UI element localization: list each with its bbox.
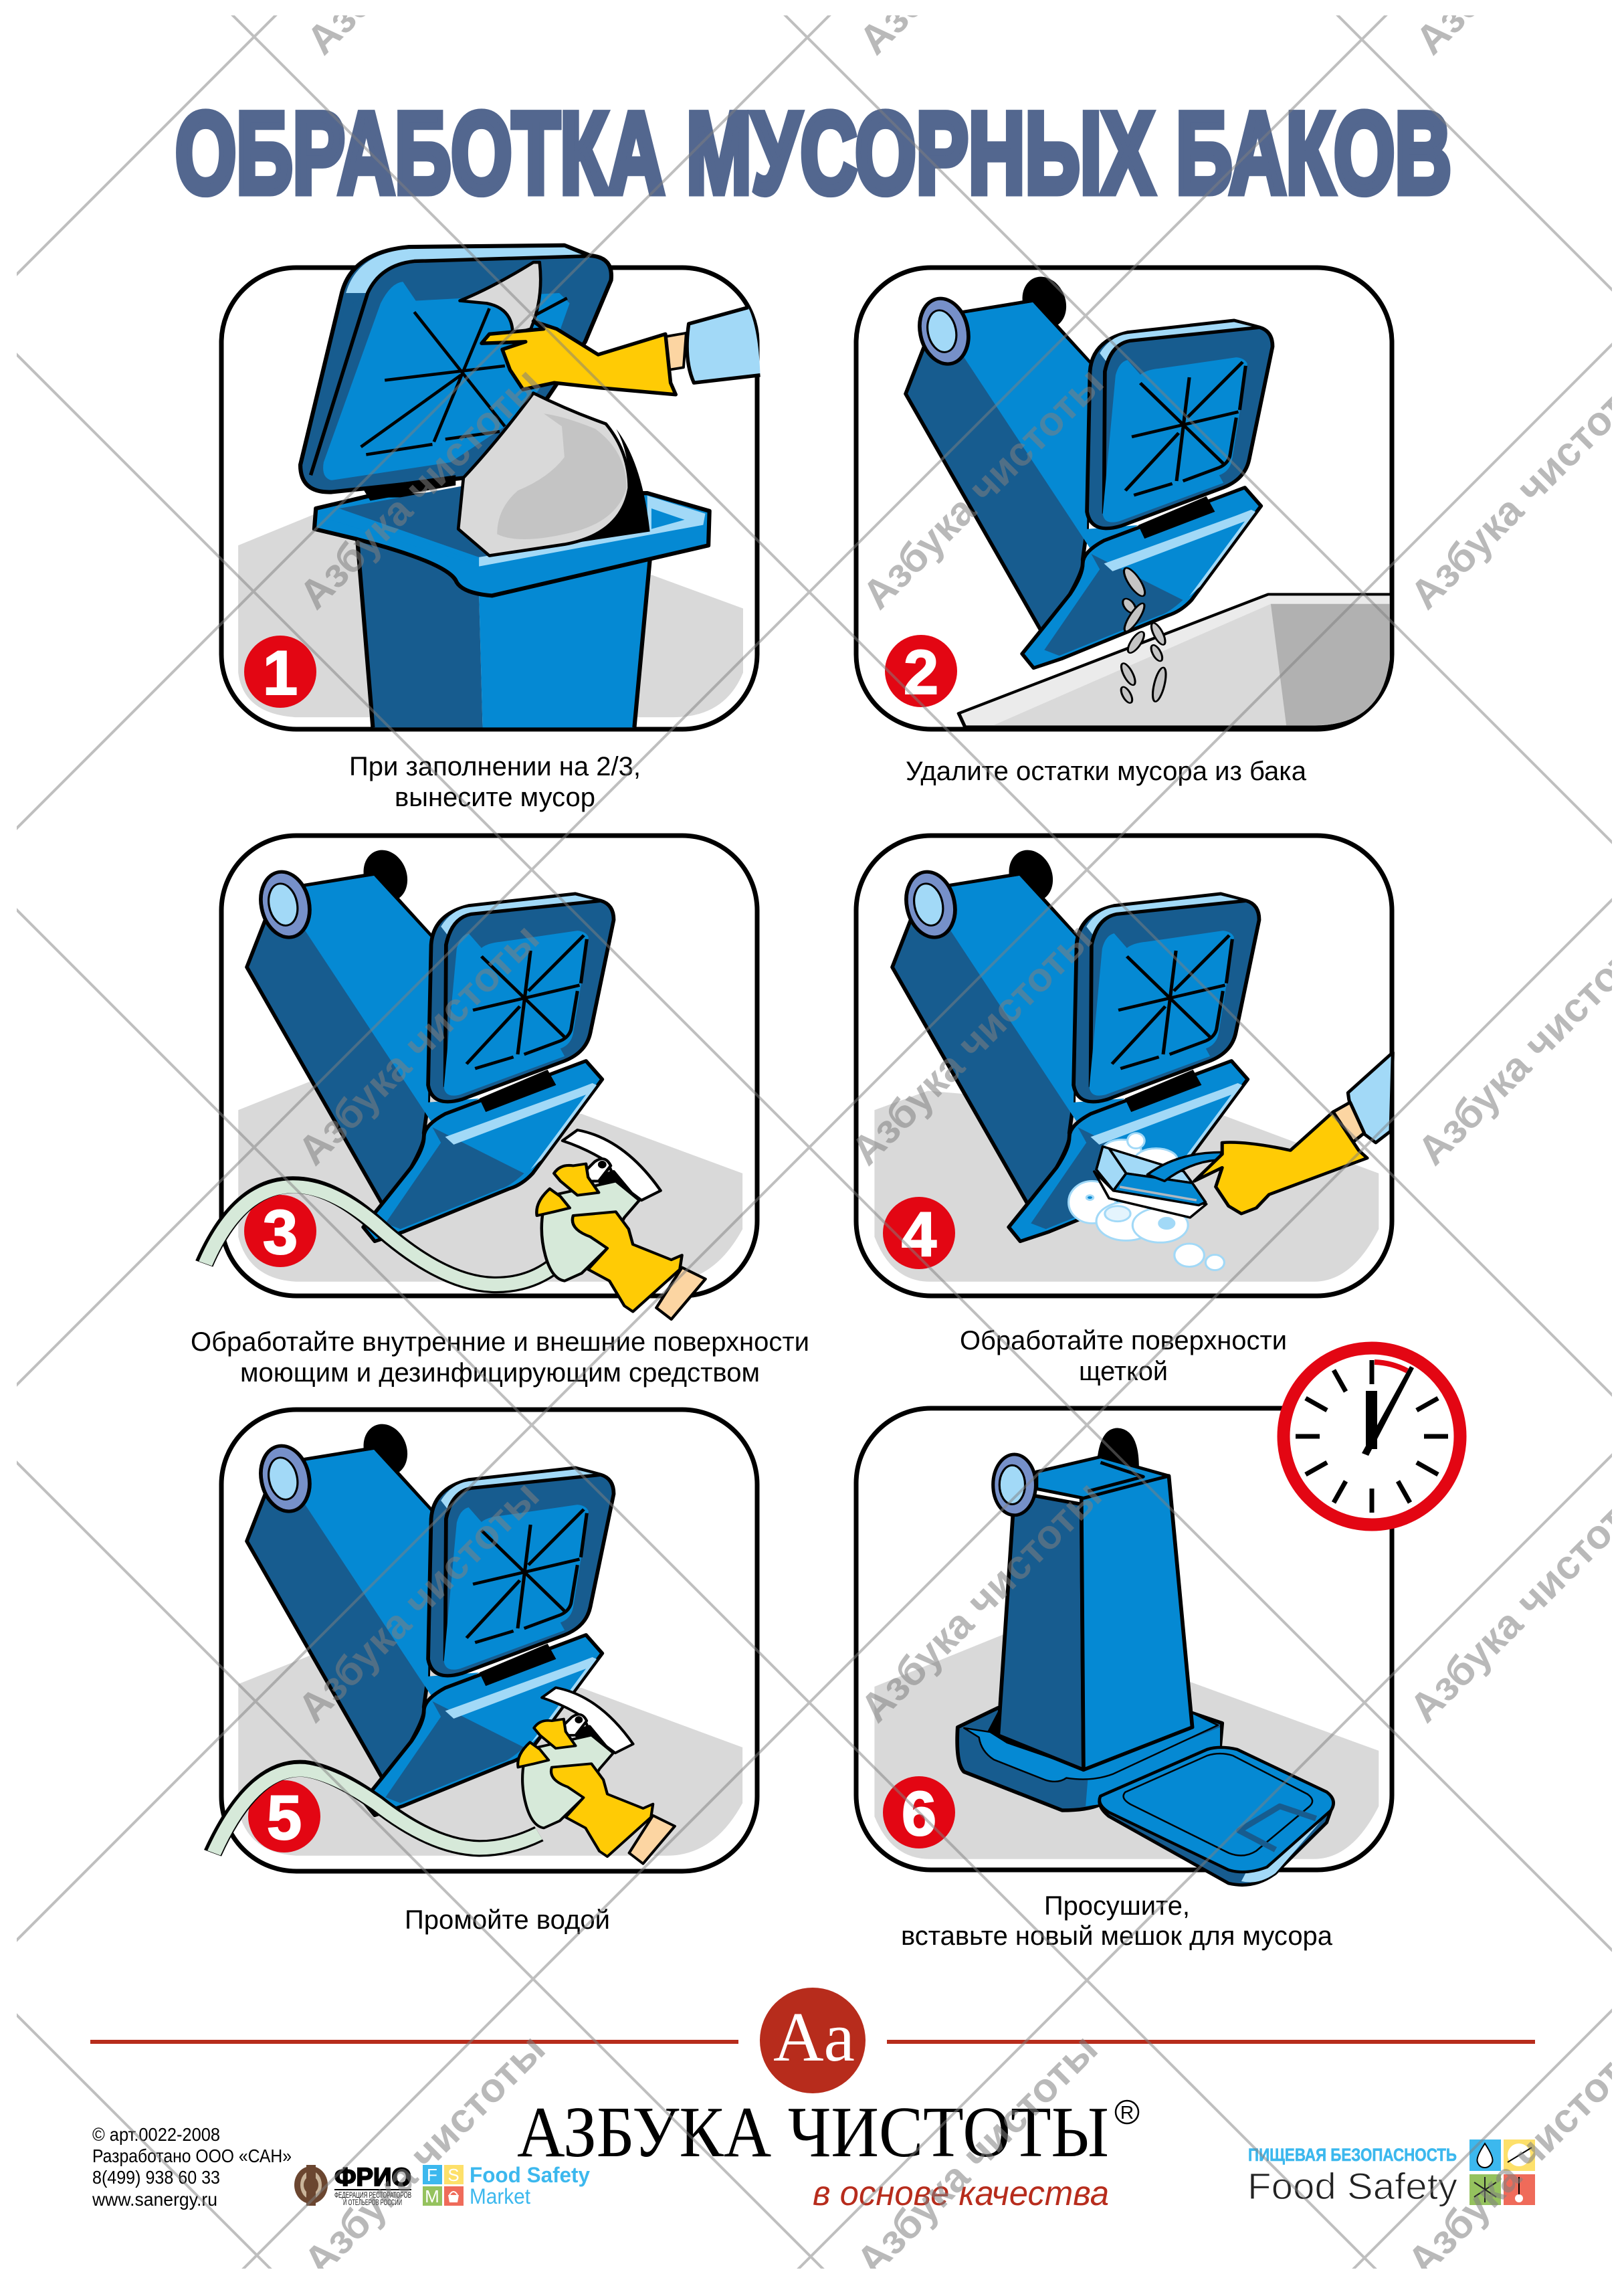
watermark text: Азбука чистоты bbox=[853, 359, 1112, 617]
panel 3: applying detergent bbox=[204, 836, 757, 1319]
clock face bbox=[1284, 1348, 1460, 1525]
watermark text: Азбука чистоты bbox=[289, 915, 548, 1173]
FRIO name: ФРИО bbox=[334, 2164, 411, 2192]
caption 3: Обработайте внутренние и внешние поверхности bbox=[191, 1327, 809, 1357]
FSM text bbox=[470, 2163, 590, 2208]
FRIO rule bbox=[334, 2189, 411, 2190]
floor bbox=[874, 1090, 1379, 1282]
illustration: bin with lid open and bag bbox=[238, 246, 760, 727]
gloved hand with sleeve bbox=[1195, 1052, 1393, 1214]
panel 6: dry and new bag bbox=[856, 1408, 1392, 1885]
tilted bin bbox=[906, 272, 1273, 668]
caption 1: вынесите мусор bbox=[395, 783, 595, 812]
panel 5: rinsing bbox=[213, 1410, 757, 1871]
footer divider left bbox=[90, 2040, 738, 2044]
hose bbox=[204, 1185, 552, 1284]
panel 1: carrying out the bag bbox=[221, 246, 760, 729]
caption 1: При заполнении на 2/3, bbox=[349, 752, 641, 781]
FSM tiles: S bbox=[447, 2165, 460, 2185]
spray bottle in gloved hand bbox=[518, 1688, 675, 1864]
FRIO description bbox=[334, 2190, 411, 2207]
panel 2: emptying the bin bbox=[856, 268, 1392, 729]
caption 1 bbox=[349, 752, 641, 812]
floor bbox=[238, 1655, 742, 1856]
watermark text: Азбука чистоты bbox=[847, 2026, 1106, 2284]
panel 5 frame bbox=[221, 1410, 757, 1871]
FSM tiles: M bbox=[425, 2186, 439, 2206]
publisher credits bbox=[92, 2124, 292, 2210]
tilted bin bbox=[892, 846, 1259, 1242]
panel 1 frame bbox=[221, 268, 757, 729]
Food Safety logo bbox=[1247, 2139, 1535, 2207]
caption 5: Промойте водой bbox=[405, 1905, 610, 1935]
brand badge Aa: Aa bbox=[773, 1998, 855, 2076]
caption 3 bbox=[191, 1327, 809, 1388]
publisher credits: © арт.0022-2008 bbox=[92, 2124, 220, 2145]
FSM tiles bbox=[423, 2165, 464, 2206]
step number 3 bbox=[244, 1195, 316, 1267]
elapsed time arc bbox=[1375, 1362, 1407, 1371]
caption 6 bbox=[901, 1891, 1333, 1951]
panel 2 frame bbox=[856, 268, 1392, 729]
brush bbox=[1094, 1147, 1222, 1218]
FSM tiles: F bbox=[427, 2165, 437, 2185]
illustration: upside-down bin with lid on floor bbox=[874, 1428, 1379, 1885]
brand badge Aa bbox=[760, 1988, 866, 2093]
watermark text: Азбука чистоты bbox=[295, 2026, 554, 2284]
falling debris bbox=[1118, 566, 1169, 704]
step number 6 bbox=[883, 1776, 955, 1848]
floor bbox=[238, 1081, 742, 1282]
watermark text: Азбука чистоты bbox=[842, 915, 1101, 1173]
step number 1 bbox=[244, 636, 316, 708]
step number 4: 4 bbox=[902, 1199, 936, 1269]
caption 4: Обработайте поверхности bbox=[960, 1326, 1287, 1355]
step number 1: 1 bbox=[263, 638, 298, 708]
registered mark bbox=[1116, 2101, 1138, 2123]
panel 4 frame bbox=[856, 836, 1392, 1296]
step number 5: 5 bbox=[267, 1782, 302, 1852]
footer divider right bbox=[887, 2040, 1535, 2044]
brand name: АЗБУКА ЧИСТОТЫ bbox=[517, 2093, 1109, 2172]
foam bbox=[1069, 1133, 1224, 1270]
caption 6: Просушите, bbox=[1044, 1891, 1190, 1921]
clock hands bbox=[1362, 1366, 1414, 1456]
step number 4 bbox=[883, 1197, 955, 1269]
caption 2: Удалите остатки мусора из бака bbox=[906, 757, 1307, 786]
brand slogan: в основе качества bbox=[813, 2174, 1109, 2213]
sink bbox=[958, 594, 1391, 727]
hose bbox=[213, 1768, 539, 1853]
step number 6: 6 bbox=[902, 1778, 936, 1848]
FRIO emblem bbox=[294, 2165, 328, 2206]
tilted bin bbox=[247, 846, 614, 1242]
publisher credits: www.sanergy.ru bbox=[92, 2189, 217, 2210]
clock bbox=[1284, 1348, 1460, 1525]
step number 2 bbox=[885, 635, 957, 707]
FSM text: Food Safety bbox=[470, 2163, 590, 2187]
FRIO description: ФЕДЕРАЦИЯ РЕСТОРАТОРОВ bbox=[334, 2190, 411, 2200]
FRIO description: И ОТЕЛЬЕРОВ РОССИИ bbox=[343, 2198, 402, 2207]
caption 4: щеткой bbox=[1079, 1357, 1168, 1386]
hour ticks bbox=[1296, 1360, 1448, 1513]
logo subtitle: ПИЩЕВАЯ БЕЗОПАСНОСТЬ bbox=[1248, 2145, 1457, 2165]
panel 3 frame bbox=[221, 836, 757, 1296]
watermark text: Азбука чистоты bbox=[851, 1472, 1110, 1731]
Food Safety Market logo bbox=[423, 2163, 590, 2208]
panel 6 frame bbox=[856, 1408, 1392, 1870]
watermark text: Азбука чистоты bbox=[289, 1472, 548, 1731]
logo wordmark: Food Safety bbox=[1247, 2165, 1457, 2207]
step number 3: 3 bbox=[263, 1197, 298, 1267]
panel 4: brushing bbox=[856, 836, 1393, 1296]
spray bottle in gloved hand bbox=[536, 1130, 706, 1319]
FRIO logo bbox=[294, 2164, 411, 2207]
caption 4 bbox=[960, 1326, 1287, 1386]
step number 2: 2 bbox=[904, 637, 938, 707]
tilted bin bbox=[247, 1420, 614, 1816]
registered mark: R bbox=[1120, 2102, 1134, 2123]
publisher credits: Разработано ООО «САН» bbox=[92, 2146, 292, 2166]
caption 6: вставьте новый мешок для мусора bbox=[901, 1921, 1333, 1951]
publisher credits: 8(499) 938 60 33 bbox=[92, 2167, 220, 2188]
caption 3: моющим и дезинфицирующим средством bbox=[240, 1358, 760, 1388]
FSM text: Market bbox=[470, 2184, 530, 2208]
logo tiles bbox=[1469, 2139, 1535, 2205]
watermark text: Азбука чистоты bbox=[290, 359, 549, 617]
step number 5 bbox=[248, 1780, 320, 1852]
